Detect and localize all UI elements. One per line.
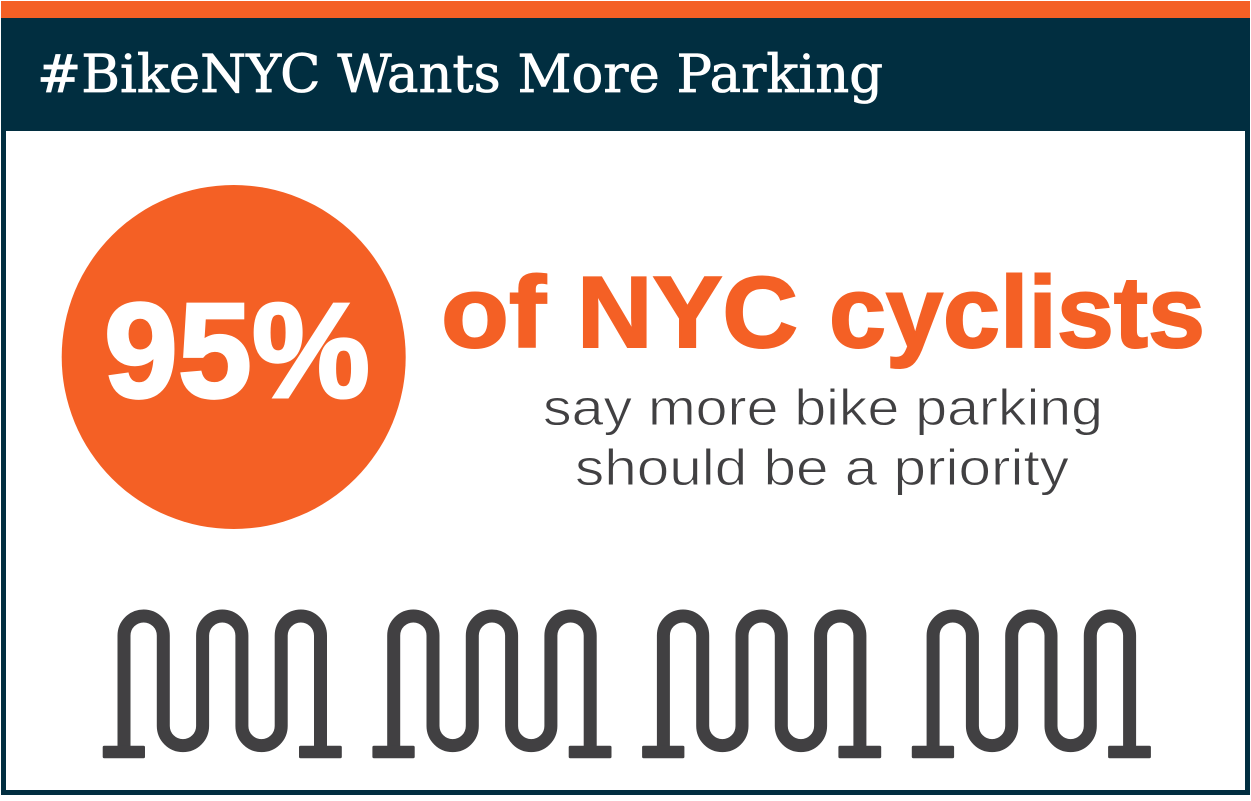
stat circle: 95% [62, 185, 406, 529]
orange top bar [1, 1, 1250, 18]
title: #BikeNYC Wants More Parking [37, 45, 883, 105]
subtext [543, 379, 1103, 496]
heading: of NYC cyclists: of [441, 257, 546, 369]
title band [1, 18, 1250, 131]
heading: of NYC cyclists: cyclists [829, 257, 1205, 369]
icon: bike rack 2 [372, 616, 612, 758]
icon: bike rack 1 [103, 616, 342, 758]
heading: of NYC cyclists [441, 257, 1205, 369]
heading: of NYC cyclists: NYC [577, 257, 798, 369]
subtext: should be a priority [575, 439, 1070, 496]
icon: bike rack 4 [912, 616, 1151, 758]
icon: bike rack 3 [642, 616, 881, 758]
subtext: say more bike parking [543, 379, 1103, 436]
stat circle: 95%: 95% [104, 275, 370, 426]
